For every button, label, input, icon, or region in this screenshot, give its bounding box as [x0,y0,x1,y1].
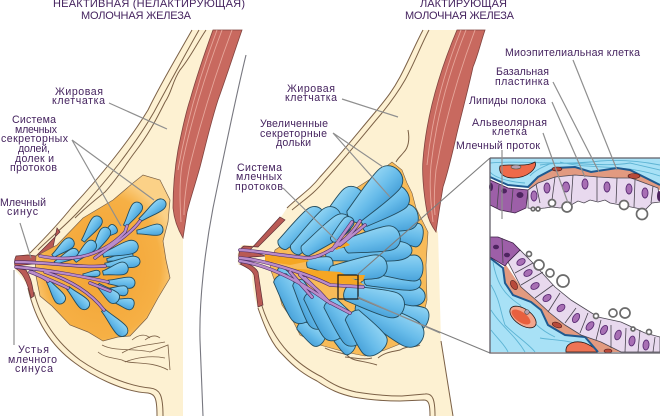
label: adipose right [285,83,337,104]
title: lactating gland: МОЛОЧНАЯ ЖЕЛЕЗА [405,10,515,22]
second lower red cell [566,342,597,352]
right orange gaps between ducts [265,241,365,285]
label: duct system right: Система [237,162,282,174]
label: basal lamina [495,66,549,88]
label: enlarged lobules: Увеличенные [260,118,328,130]
lower basal lamina [490,258,598,352]
label: adipose right: клетчатка [285,92,337,104]
label: lobe system left: долей, [18,143,50,155]
upper lipid droplets [531,200,648,220]
right skin inner line [262,30,435,416]
label: sinus orifices: млечного [8,354,57,366]
upper capillary red cell [500,162,536,178]
title: inactive gland [53,0,245,22]
left pectoral muscle [173,30,242,238]
left inner skin line [34,30,199,416]
label: adipose left: клетчатка [52,95,105,107]
label: sinus orifices: синуса [15,363,53,375]
left areola [15,228,60,298]
right skin outer line [258,30,430,416]
label: lobe system left: секреторных [1,133,69,145]
right breast illustration [238,30,490,416]
panel background [490,158,660,353]
label: milk sinus: синус [7,206,39,218]
magnified panel: alveolus [489,158,660,353]
label: alveolar cell: Альвеолярная [472,117,547,129]
label: duct system right: млечных [236,171,283,183]
lower red cell [506,302,540,332]
label: alveolar cell [472,117,547,138]
upper myoepithelial layer [528,167,660,190]
panel frame [490,158,660,353]
label: duct system right [235,162,283,193]
right chest wall line [441,341,453,416]
upper basal lamina [490,167,660,187]
left breast illustration [14,30,246,416]
left fat boundary [75,30,206,218]
callout connector lines [357,158,490,353]
left secretory lobules [43,196,168,339]
magnified area marker [338,275,358,299]
lower stroma [490,258,598,352]
right secretory lobules [268,160,432,361]
label: enlarged lobules: дольки [276,137,311,149]
lower duct cells [490,237,520,266]
left breast body [14,30,213,416]
rib line left [200,55,246,416]
label: alveolar cell: клетка [492,126,527,138]
label: adipose left: Жировая [55,86,103,98]
title: lactating gland [405,0,515,22]
left fat lobules [98,335,170,370]
label: lobe system left: протоков [10,162,57,174]
left skin layer [28,30,192,416]
right pectoral muscle [423,30,485,232]
lower myoepithelial nuclei [509,279,612,353]
right milk ducts [240,221,365,313]
lower myoepithelial layer [503,265,625,352]
pointer lines [14,60,617,345]
label: basal lamina: Базальная [496,66,549,78]
label: milk sinus: Млечный [0,197,46,209]
upper duct cells [489,180,528,213]
label: lobe system left: Система [12,114,56,126]
left glandular tissue [35,175,170,341]
label: enlarged lobules: секреторные [260,128,327,140]
label: lobe system left: млечных [15,124,58,136]
upper stroma [490,158,660,187]
label: milk lipids: Липиды полока [469,95,546,107]
right glandular tissue [270,162,428,356]
label: lobe system left [1,114,69,174]
right upper fat boundary [396,130,409,162]
upper alveolar cells [528,175,660,210]
right areola [239,217,285,307]
left milk ducts [16,221,140,310]
right lower wavy tissue [325,345,420,365]
label: basal lamina: пластинка [495,76,549,88]
label: adipose left [52,86,105,107]
upper myoepithelial nuclei [552,167,640,178]
label: lobe system left: долек и [15,153,54,165]
label: sinus orifices: Устья [18,344,49,356]
lower lipid droplets [526,252,652,334]
label: sinus orifices [8,344,57,375]
label: adipose right: Жировая [287,83,335,95]
label: duct system right: протоков [235,181,283,193]
label: myoepithelial cell: Миоэпителиальная клетка [505,47,640,59]
label: milk sinus [0,197,46,218]
label: enlarged lobules [260,118,328,149]
right breast body [238,30,457,416]
title: inactive gland: МОЛОЧНАЯ ЖЕЛЕЗА [81,10,192,22]
lower alveolar cells [508,250,660,352]
label: milk duct: Млечный проток [456,140,540,152]
